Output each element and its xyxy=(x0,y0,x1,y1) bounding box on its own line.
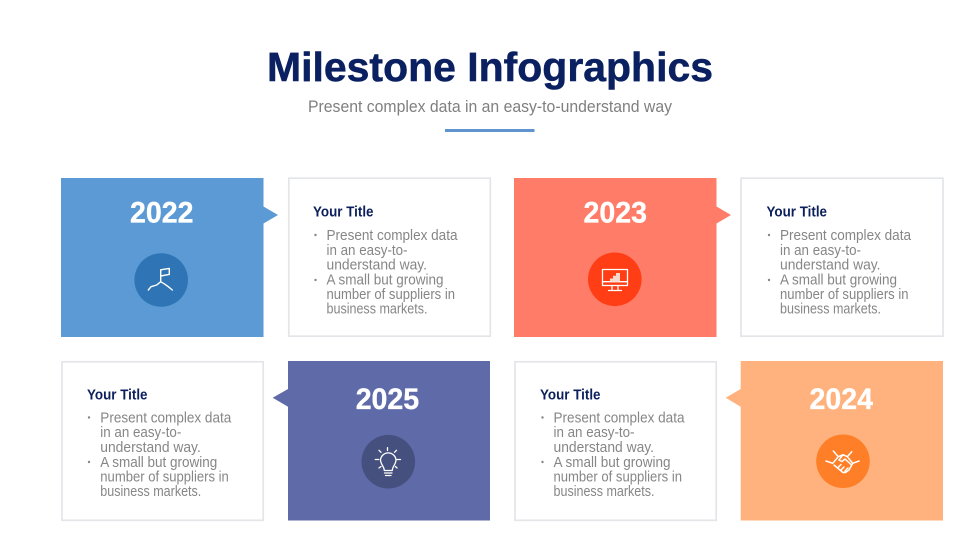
bullet list: understand way. xyxy=(326,258,427,274)
bullet list: number of suppliers in xyxy=(780,287,908,303)
card title: Your Title xyxy=(313,204,374,221)
bullet list: Present complex data xyxy=(100,410,232,426)
panel: 2022 text card xyxy=(289,178,490,336)
bullet list: business markets. xyxy=(780,302,881,318)
panel: 2023 year block xyxy=(514,178,731,337)
icon: monitor with chart xyxy=(588,252,642,306)
bullet list: A small but growing xyxy=(326,272,444,288)
year 2022: 2022 xyxy=(130,196,194,230)
year 2025: 2025 xyxy=(356,383,419,416)
bullet list: A small but growing xyxy=(100,455,217,471)
bullet list: business markets. xyxy=(326,302,428,318)
bullet list xyxy=(541,410,685,500)
bullet list: number of suppliers in xyxy=(554,470,682,486)
card title: Your Title xyxy=(87,386,148,404)
panel: 2024 text card xyxy=(515,362,716,520)
bullet list: understand way. xyxy=(780,258,880,274)
bullet list: in an easy-to- xyxy=(100,425,181,441)
bullet list: business markets. xyxy=(100,484,201,500)
bullet list: understand way. xyxy=(100,440,201,456)
bullet list xyxy=(88,410,232,500)
bullet list: number of suppliers in xyxy=(100,470,229,486)
year 2024: 2024 xyxy=(810,383,874,416)
bullet list: Present complex data xyxy=(326,228,458,244)
icon: flag on mountain xyxy=(134,253,188,307)
subtitle: Present complex data in an easy-to-understand way xyxy=(308,98,673,116)
bullet list xyxy=(768,228,912,318)
panel: 2025 year block xyxy=(273,361,490,520)
bullet list: A small but growing xyxy=(554,455,670,471)
card title: Your Title xyxy=(766,204,827,221)
bullet list: Present complex data xyxy=(554,410,685,426)
bullet list: A small but growing xyxy=(780,272,897,288)
bullet list: understand way. xyxy=(554,440,654,456)
bullet list: in an easy-to- xyxy=(554,425,635,441)
bullet list: business markets. xyxy=(554,484,654,500)
icon: handshake xyxy=(816,434,870,488)
bullet list: in an easy-to- xyxy=(326,243,408,259)
panel: 2022 year block xyxy=(61,178,278,337)
panel: 2024 year block xyxy=(726,361,943,520)
bullet list: in an easy-to- xyxy=(780,243,861,259)
card title: Your Title xyxy=(540,386,600,404)
year 2023: 2023 xyxy=(584,196,647,230)
bullet list: number of suppliers in xyxy=(326,287,455,303)
panel: 2025 text card xyxy=(62,362,263,520)
bullet list xyxy=(314,228,458,318)
icon: light bulb xyxy=(362,435,415,489)
title: Milestone Infographics xyxy=(267,44,713,90)
panel: 2023 text card xyxy=(741,178,943,336)
bullet list: Present complex data xyxy=(780,228,912,244)
